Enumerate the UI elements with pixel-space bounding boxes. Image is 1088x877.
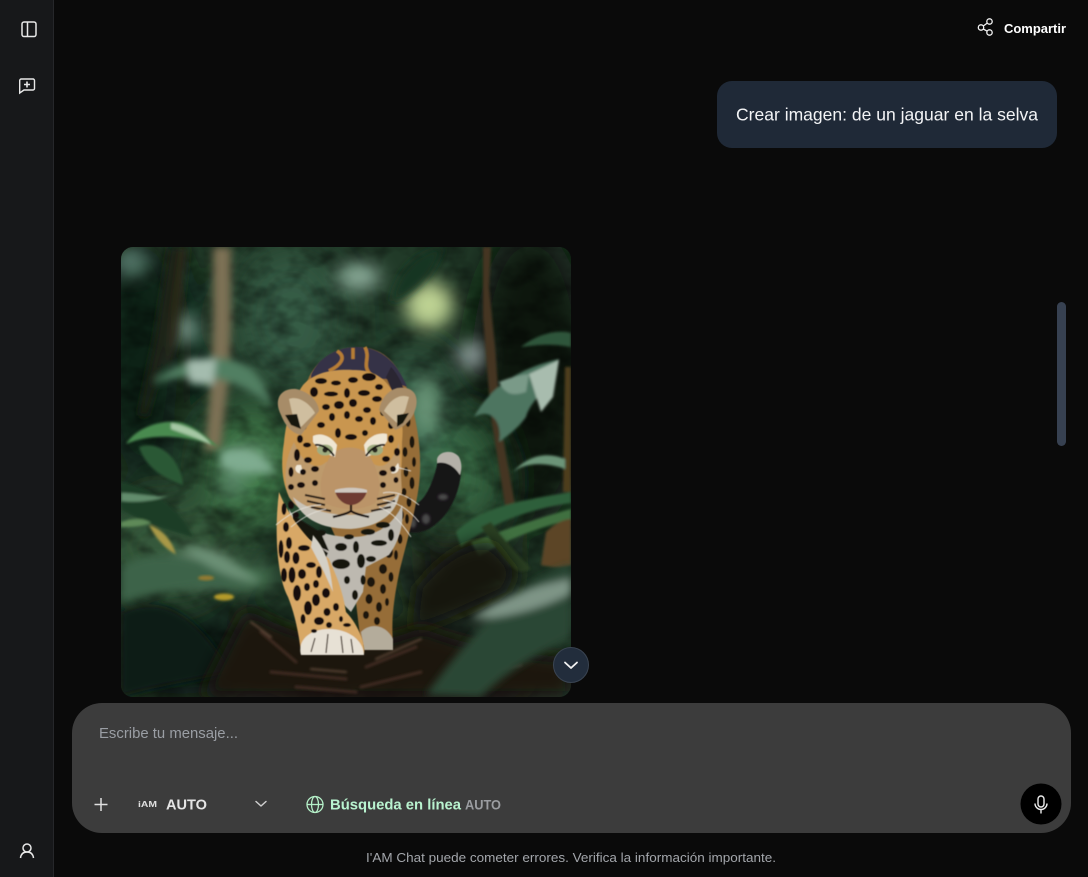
icon: share	[978, 19, 992, 35]
left side leaves	[121, 422, 219, 555]
jaguar rosettes	[288, 373, 400, 490]
jaguar tail	[410, 451, 462, 534]
icon: microphone	[1035, 796, 1047, 814]
jungle log shadow	[411, 542, 516, 632]
share button	[978, 19, 1066, 36]
online search label: Búsqueda en línea	[330, 798, 462, 814]
foreground blurred leaves	[121, 547, 261, 697]
foliage mottling	[121, 247, 571, 697]
jaguar front leg	[277, 492, 364, 655]
jaguar ears	[278, 388, 417, 435]
icon: sidebar toggle	[22, 22, 36, 36]
message input panel	[72, 703, 1071, 833]
icon: globe	[307, 796, 323, 812]
jaguar head	[276, 370, 419, 537]
jaguar whiskers	[276, 467, 419, 537]
blurred foreground leaf	[426, 565, 571, 697]
jaguar face	[282, 369, 403, 506]
input placeholder: Escribe tu mensaje...	[99, 725, 238, 742]
forest floor	[198, 576, 571, 697]
icon: chevron down	[565, 662, 577, 668]
model name: AUTO	[166, 796, 207, 814]
online search mode: AUTO	[465, 796, 501, 812]
jaguar	[276, 347, 461, 655]
right side vines and foliage	[456, 247, 571, 572]
left sidebar	[0, 0, 54, 877]
jaguar chest	[289, 505, 403, 612]
icon: user profile	[20, 844, 34, 858]
icon: new chat	[20, 79, 34, 93]
disclaimer footer: I'AM Chat puede cometer errores. Verifica la información importante.	[366, 850, 776, 865]
share label: Compartir	[1004, 21, 1066, 36]
scroll down button	[554, 648, 588, 682]
model logo: iAM	[138, 800, 157, 809]
jaguar back and far leg	[301, 347, 420, 650]
bubble text: Crear imagen: de un jaguar en la selva	[736, 104, 1038, 124]
blurred light patches and trunks	[113, 247, 485, 590]
jaguar eyes	[317, 444, 333, 456]
jungle background	[121, 247, 571, 697]
generated jaguar image	[121, 247, 571, 697]
microphone button	[1020, 784, 1062, 824]
user message bubble	[717, 81, 1057, 148]
jaguar nose and mouth	[335, 492, 367, 506]
icon: model dropdown chevron	[256, 802, 266, 806]
icon: plus	[94, 798, 108, 811]
scrollbar thumb	[1057, 302, 1066, 446]
